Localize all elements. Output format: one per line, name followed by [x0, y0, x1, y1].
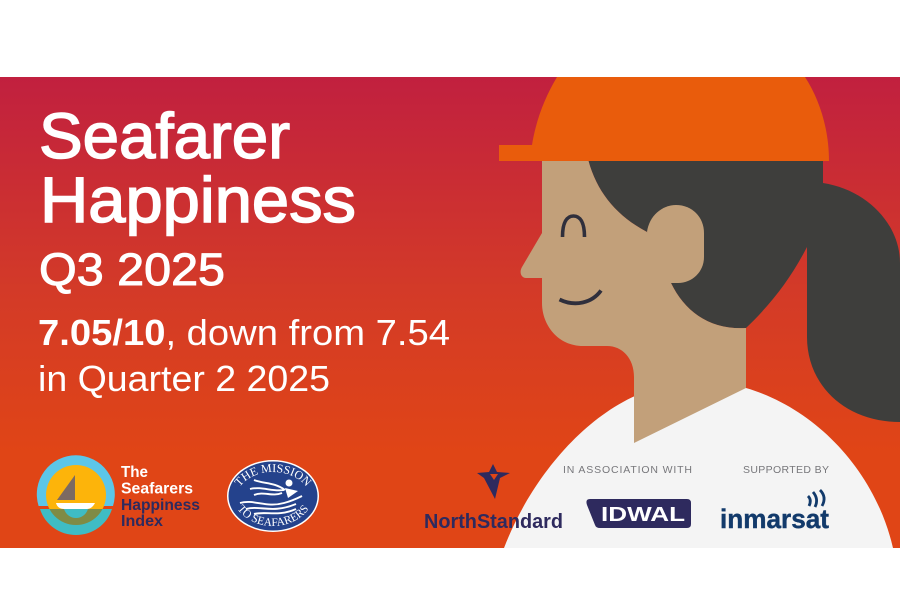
logo: IDWAL: IDWAL [601, 504, 685, 526]
illustration: seafarer in hard hat [499, 77, 900, 548]
logo wordmark: Happiness [121, 497, 200, 514]
quarter heading: Q3 2025 [39, 244, 225, 295]
wordmark: inmarsat [720, 504, 829, 534]
title: Seafarer [39, 100, 290, 172]
logo wordmark: The [121, 464, 148, 481]
signal waves icon [808, 490, 824, 507]
logo: inmarsat [720, 490, 829, 534]
hard hat [499, 77, 829, 161]
logo: IDWAL [586, 499, 691, 528]
headline score: in Quarter 2 2025 [38, 358, 330, 399]
title [39, 100, 356, 236]
ponytail and hair [587, 155, 900, 422]
headline score: 7.05/10, down from 7.54 [38, 312, 450, 353]
label: supported by: SUPPORTED BY [743, 464, 829, 476]
logo: The Mission to Seafarers: TO SEAFARERS [238, 504, 308, 526]
logo: NorthStandard [424, 464, 563, 533]
logo wordmark [121, 464, 200, 530]
logo wordmark: Seafarers [121, 480, 193, 498]
face and neck [521, 155, 746, 443]
star icon [477, 464, 510, 499]
shirt [504, 381, 893, 548]
wordmark: NorthStandard [424, 511, 563, 533]
logo: The Mission to Seafarers: THE MISSION [234, 464, 312, 486]
title: Happiness [40, 164, 356, 236]
logo: The Mission to Seafarers [227, 460, 319, 532]
banner background [0, 77, 900, 548]
logo wordmark: Index [121, 513, 163, 530]
ear [647, 205, 704, 283]
logo emblem [37, 455, 115, 535]
eye [562, 216, 584, 237]
smile [560, 290, 601, 303]
headline score [38, 312, 450, 399]
label: in association with: IN ASSOCIATION WITH [563, 464, 692, 476]
logo: Seafarers Happiness Index [37, 455, 200, 535]
